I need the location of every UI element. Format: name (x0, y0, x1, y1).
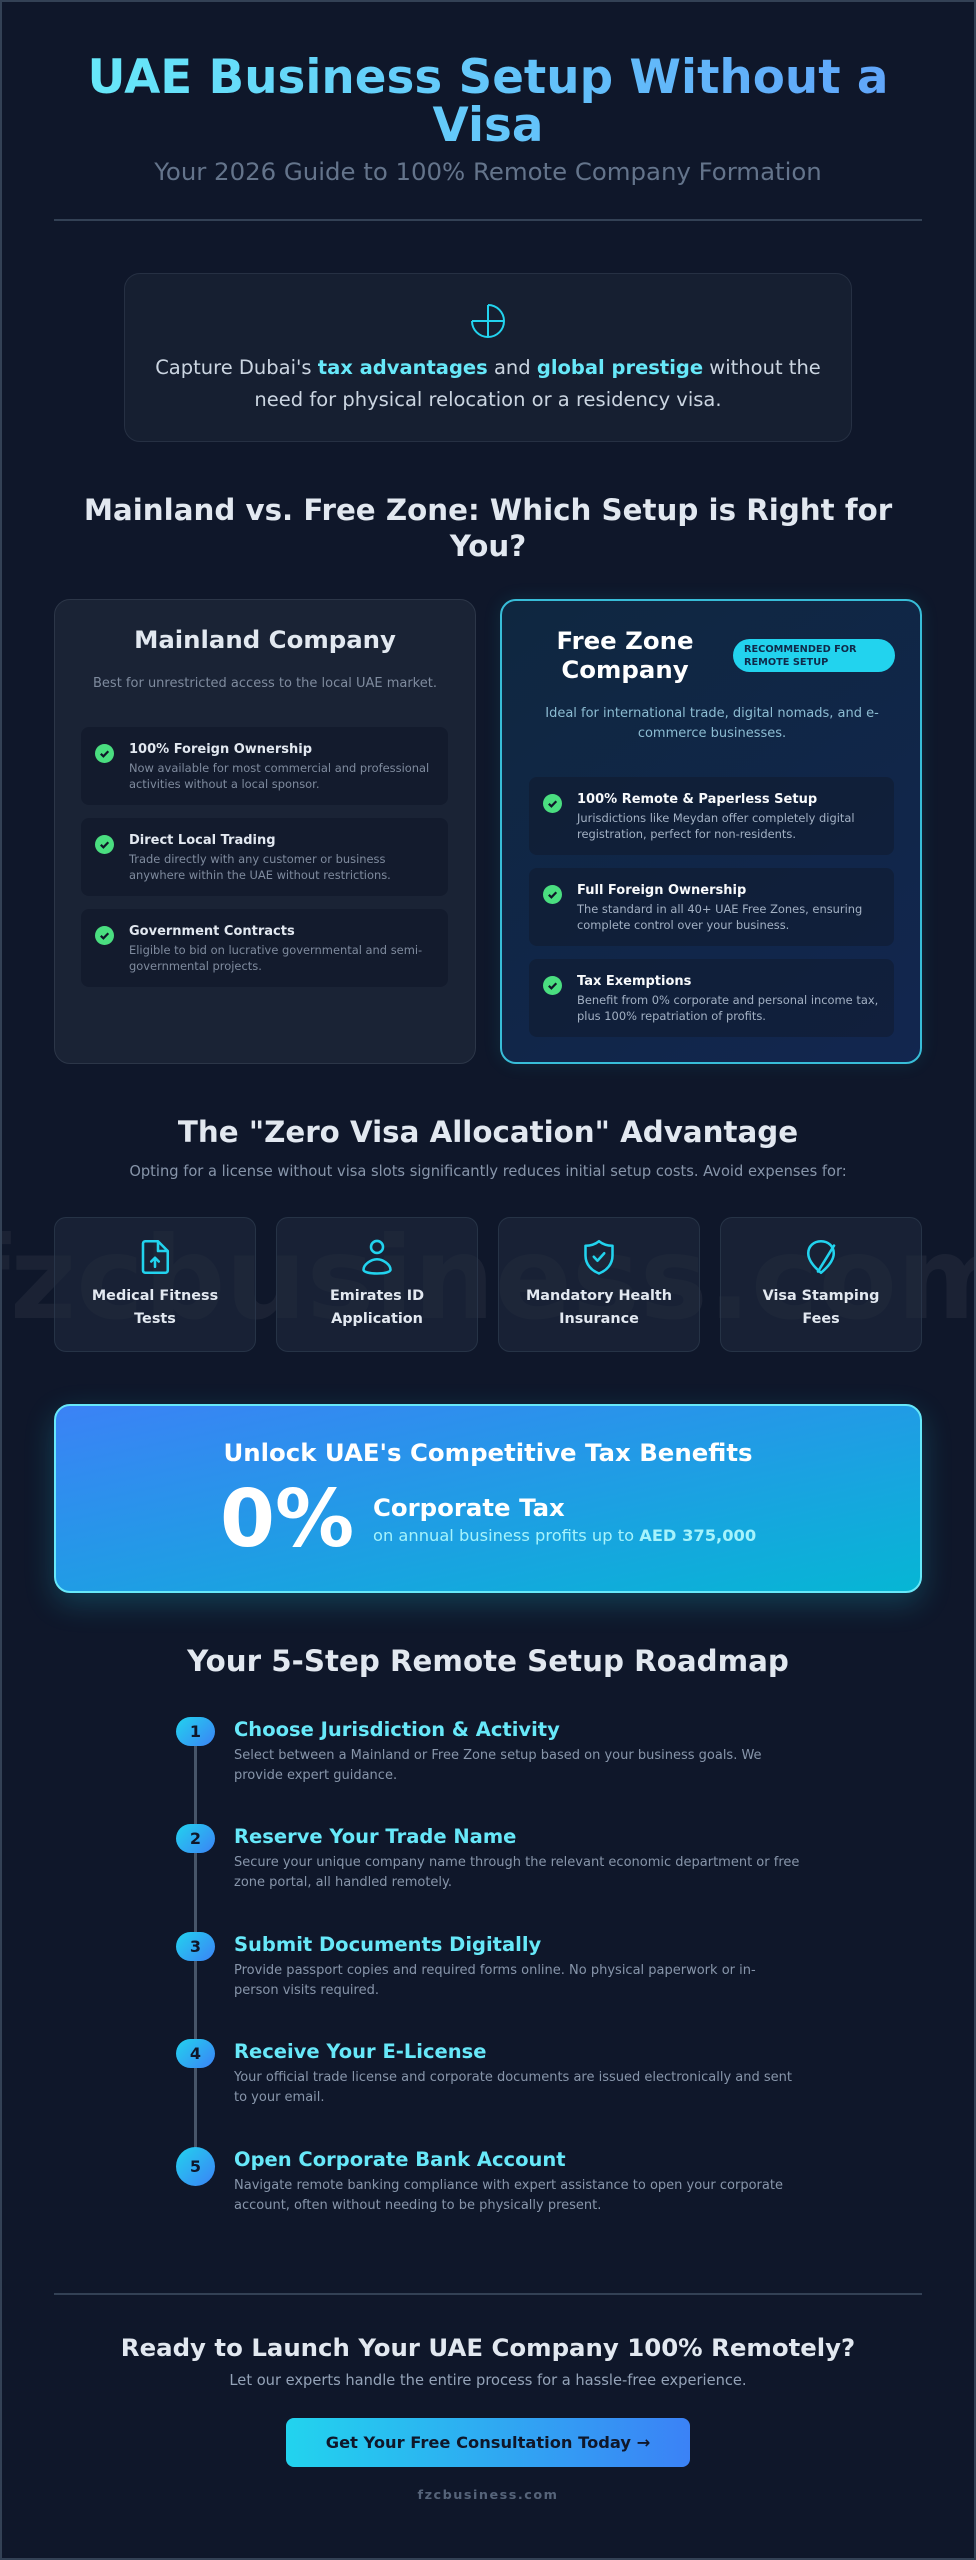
card: emirates id application: Emirates ID (330, 1288, 424, 1304)
badge: recommended: REMOTE SETUP (744, 657, 828, 668)
feature: government contracts: governmental projects. (129, 959, 262, 973)
feature: remote and paperless: registration, perfect for non-residents. (577, 827, 796, 841)
step 3: Submit Documents Digitally (234, 1933, 541, 1956)
free zone heading: Company (561, 655, 689, 684)
step 1: Choose Jurisdiction & Activity (234, 1718, 560, 1741)
heading: mainland vs free zone: You? (450, 529, 526, 563)
intro text (155, 356, 821, 411)
card: emirates id application: Application (331, 1311, 423, 1327)
feature: foreign ownership (81, 727, 448, 805)
step 1: 1 (190, 1722, 201, 1741)
title (88, 51, 888, 153)
stat label: Corporate Tax (373, 1493, 565, 1522)
panel: mainland company (54, 599, 476, 1064)
zero visa description: Opting for a license without visa slots significantly reduces initial setup costs. Avoid expenses for: (129, 1163, 847, 1180)
step 5: Open Corporate Bank Account (234, 2148, 566, 2171)
title: Visa (433, 99, 543, 153)
feature: remote and paperless: 100% Remote & Paperless Setup (577, 792, 817, 807)
panel: intro (124, 273, 852, 442)
card: visa stamping fees: Visa Stamping (763, 1288, 879, 1304)
feature: tax exemptions: Benefit from 0% corporate and personal income tax, (577, 993, 878, 1007)
subtitle: Your 2026 Guide to 100% Remote Company Formation (154, 157, 822, 186)
icon: globe (471, 304, 505, 338)
mainland description: Best for unrestricted access to the local UAE market. (93, 676, 437, 691)
card: visa stamping fees (720, 1217, 922, 1352)
title: UAE Business Setup Without a (88, 51, 888, 105)
free zone description: commerce businesses. (638, 726, 786, 741)
step 2: 2 (190, 1829, 201, 1848)
card: medical fitness tests: Tests (134, 1311, 176, 1327)
heading: roadmap: Your 5-Step Remote Setup Roadmap (187, 1644, 789, 1678)
feature: full foreign ownership: complete control over your business. (577, 918, 789, 932)
step 2: zone portal, all handled remotely. (234, 1875, 452, 1890)
step 4: Your official trade license and corporate documents are issued electronically and sent (234, 2070, 792, 2085)
badge: recommended: RECOMMENDED FOR (744, 644, 857, 655)
card: mandatory health insurance: Insurance (559, 1311, 639, 1327)
stat note: on annual business profits up to AED 375,000 (373, 1526, 756, 1545)
free zone description (545, 706, 879, 741)
step 5: account, often without needing to be physically present. (234, 2198, 601, 2213)
card: medical fitness tests: Medical Fitness (92, 1288, 218, 1304)
step 5: Navigate remote banking compliance with expert assistance to open your corporate (234, 2178, 783, 2193)
step 1: provide expert guidance. (234, 1768, 397, 1783)
feature: direct local trading (81, 818, 448, 896)
step 1: Select between a Mainland or Free Zone setup based on your business goals. We (234, 1748, 762, 1763)
heading: zero visa allocation: The "Zero Visa Allocation" Advantage (178, 1115, 798, 1149)
feature: tax exemptions (529, 959, 894, 1037)
cta heading: Ready to Launch Your UAE Company 100% Remotely? (121, 2333, 855, 2362)
card: emirates id application (276, 1217, 478, 1352)
step 3: 3 (190, 1937, 201, 1956)
step 4 (176, 2039, 792, 2105)
feature: tax exemptions: Tax Exemptions (577, 974, 691, 989)
cta subtext: Let our experts handle the entire process for a hassle-free experience. (229, 2372, 747, 2389)
feature: full foreign ownership (529, 868, 894, 946)
card: medical fitness tests (54, 1217, 256, 1352)
step 2: Reserve Your Trade Name (234, 1825, 516, 1848)
heading: mainland vs free zone: Mainland vs. Free Zone: Which Setup is Right for (84, 493, 892, 527)
heading: mainland vs free zone (84, 493, 892, 563)
feature: government contracts (81, 909, 448, 987)
site url: fzcbusiness.com (418, 2488, 558, 2503)
panel: free zone company (500, 599, 922, 1064)
step 5 (176, 2147, 783, 2213)
free zone heading (556, 626, 694, 684)
feature: government contracts: Government Contracts (129, 924, 295, 939)
free zone description: Ideal for international trade, digital nomads, and e- (545, 706, 879, 721)
card: mandatory health insurance (498, 1217, 700, 1352)
feature: tax exemptions: plus 100% repatriation of profits. (577, 1009, 766, 1023)
cta button (286, 2418, 690, 2467)
step 3: person visits required. (234, 1983, 379, 1998)
feature: foreign ownership: activities without a local sponsor. (129, 777, 319, 791)
feature: foreign ownership: Now available for most commercial and professional (129, 761, 429, 775)
step 3 (176, 1932, 756, 1998)
feature: remote and paperless: Jurisdictions like Meydan offer completely digital (577, 811, 855, 825)
feature: direct local trading: Trade directly with any customer or business (129, 852, 385, 866)
step 1 (176, 1717, 762, 1783)
step 2: Secure your unique company name through the relevant economic department or free (234, 1855, 799, 1870)
feature: foreign ownership: 100% Foreign Ownership (129, 742, 312, 757)
tax heading: Unlock UAE's Competitive Tax Benefits (223, 1438, 753, 1467)
card: visa stamping fees: Fees (802, 1311, 840, 1327)
feature: direct local trading: anywhere within the UAE without restrictions. (129, 868, 391, 882)
step 3: Provide passport copies and required forms online. No physical paperwork or in- (234, 1963, 756, 1978)
feature: full foreign ownership: The standard in all 40+ UAE Free Zones, ensuring (577, 902, 862, 916)
feature: direct local trading: Direct Local Trading (129, 833, 276, 848)
step 4: Receive Your E-License (234, 2040, 486, 2063)
cta button: Get Your Free Consultation Today → (326, 2433, 650, 2452)
panel: tax banner (54, 1404, 922, 1593)
mainland heading: Mainland Company (134, 625, 396, 654)
stat: 0 percent: 0% (220, 1473, 354, 1565)
step 4: to your email. (234, 2090, 325, 2105)
feature: full foreign ownership: Full Foreign Ownership (577, 883, 746, 898)
step 2 (176, 1824, 799, 1890)
free zone heading: Free Zone (556, 626, 694, 655)
feature: government contracts: Eligible to bid on lucrative governmental and semi- (129, 943, 422, 957)
step 4: 4 (190, 2044, 201, 2063)
step 5: 5 (190, 2157, 201, 2176)
badge: recommended (733, 639, 895, 672)
feature: remote and paperless (529, 777, 894, 855)
card: mandatory health insurance: Mandatory Health (526, 1288, 672, 1304)
intro text: need for physical relocation or a residency visa. (254, 388, 722, 411)
intro text: Capture Dubai's tax advantages and global prestige without the (155, 356, 821, 379)
